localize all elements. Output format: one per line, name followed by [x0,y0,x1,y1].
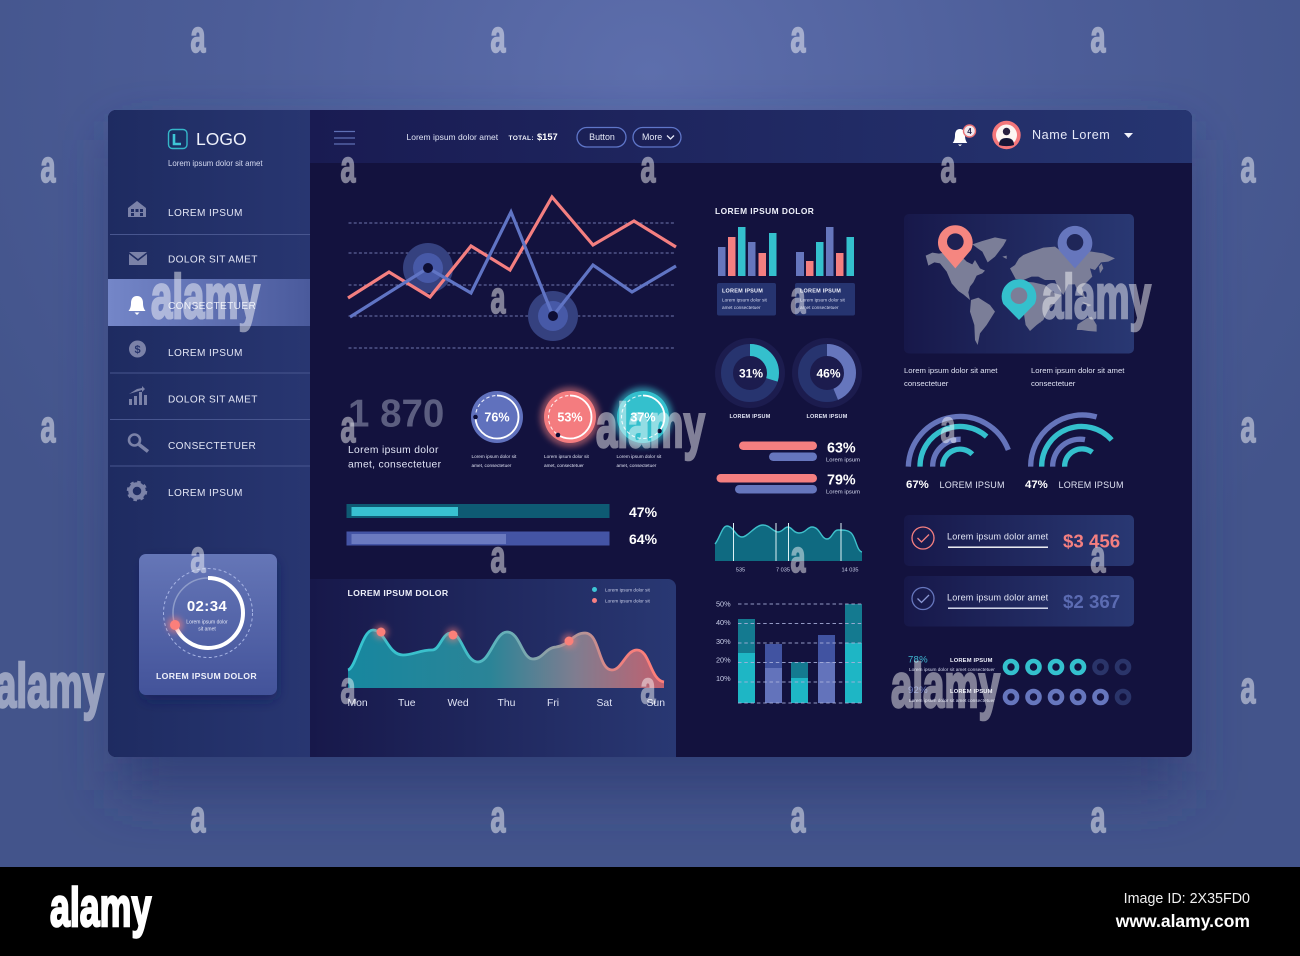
pin: teal [1002,279,1036,320]
y axis: 50% [716,600,731,608]
watermark tiles: a [190,531,206,582]
day axis [348,698,664,706]
menu highlight [108,279,310,326]
menu item: consectetuer (active): CONSECTETUER [168,301,256,312]
y axis: 20% [716,656,731,664]
logo: LOGO [196,129,247,149]
watermark tiles: a [1090,11,1106,62]
map caption: right: consectetuer [1031,379,1076,388]
watermark tiles: a [340,141,356,192]
stacked bar chart [716,600,862,703]
timer card: LOREM IPSUM DOLOR [156,671,257,681]
menu item: dolor sit amet: DOLOR SIT AMET [168,254,258,266]
timer card: 02:34 [187,598,227,615]
menu item: lorem ipsum: $ [134,344,141,356]
watermark tiles: a [790,531,806,582]
watermark tiles: a [640,141,656,192]
watermark tiles: a [1240,401,1256,452]
stat card: $2 367: $2 367 [1063,591,1120,612]
area stroke [348,630,664,682]
KPI number: 1 870 [348,392,444,436]
menu item: lorem ipsum [128,201,242,217]
menu item: lorem ipsum: LOREM IPSUM [168,208,243,219]
watermark wordmarks: alamy [891,651,1000,720]
image id: Image ID: 2X35FD0 [1124,891,1250,907]
day axis: Sun [646,698,665,709]
legend [592,587,651,604]
bar 5 [845,604,862,703]
timer card: Lorem ipsum dolor [186,620,228,626]
radial gauge: 76%: 76% [484,410,510,424]
donut chart: 31%: 31% [739,366,763,380]
arc gauge: 67%: 67% [906,479,929,491]
top bar summary: TOTAL: [508,135,534,142]
dashboard window [108,110,1192,757]
progress bar: 47%: 47% [629,504,658,520]
watermark tiles: a [490,791,506,842]
pill bars: 79%: 79% [827,472,856,488]
stat card: $2 367 [904,576,1134,626]
map caption: right: Lorem ipsum dolor sit amet [1031,366,1125,375]
radial gauge: 53%: 53% [557,410,583,424]
middle column heading: LOREM IPSUM DOLOR [715,206,814,216]
dot row: 92% [908,685,1129,704]
donut chart: 46%: LOREM IPSUM [806,414,848,420]
caption box: right [795,283,855,316]
caption box: left: LOREM IPSUM [722,288,763,294]
KPI number: Lorem ipsum dolor [348,445,439,456]
button: more [633,128,681,147]
bar 2 [765,644,782,703]
menu item: lorem ipsum [129,340,243,359]
y axis: 10% [716,674,731,683]
dot row: 92%: LOREM IPSUM [950,689,993,695]
watermark tiles: a [340,662,356,713]
top bar summary: Lorem ipsum dolor amet [406,132,499,142]
icon: dropdown arrow [1124,133,1133,138]
progress bar: 47% [346,504,657,518]
KPI number [348,399,443,469]
panel: sidebar [108,110,310,757]
y axis [716,600,731,683]
radial gauge: 76%: Lorem ipsum dolor sit [472,454,517,459]
watermark tiles: a [1090,791,1106,842]
line chart [348,197,676,348]
dot row: 78% [908,654,1129,673]
caption box: right: Lorem ipsum dolor sit [800,298,846,302]
day axis: Fri [547,698,559,709]
stat card: $3 456: Lorem ipsum dolor amet [947,532,1049,542]
avatar [992,121,1021,149]
footer bar [0,867,1300,956]
donut chart: 46% [792,338,862,420]
watermark tiles: a [190,791,206,842]
dot row: 92%: 92% [908,685,928,696]
watermark tiles: a [40,141,56,192]
bar 4 [818,635,835,703]
pin: red [938,225,973,268]
arc gauge: 47% [1025,415,1124,491]
watermark tiles: a [190,11,206,62]
icon: notification bell [953,125,976,146]
menu item: dolor sit amet [129,386,258,406]
radial gauge: 76%: amet, consectetuer [472,463,512,468]
red series [348,197,676,298]
dot row: 78%: Lorem ipsum dolor sit amet consectetuer [909,667,995,673]
button: more: More [642,132,662,142]
pill bars: 63%: 63% [827,440,856,456]
watermark wordmarks: alamy [596,391,705,460]
watermark tiles: a [1090,531,1106,582]
menu item: dolor sit amet [129,252,258,266]
watermark tiles: a [790,11,806,62]
small area chart: 7 035 [776,568,790,574]
stat card: $3 456: $3 456 [1063,530,1120,552]
day axis: Wed [448,698,469,709]
logo subtitle: Lorem ipsum dolor sit amet [168,159,263,168]
pin: blue [1058,226,1092,268]
radial gauge: 37%: amet, consectetuer [616,463,657,468]
watermark tiles: a [640,662,656,713]
radial gauge: 53%: Lorem ipsum dolor sit [544,454,590,459]
top bar summary [407,134,558,142]
menu item: consectetuer: CONSECTETUER [168,441,256,452]
watermark tiles: a [40,401,56,452]
menu item: lorem ipsum: LOREM IPSUM [168,488,243,499]
area markers [374,624,576,648]
mini bar chart: left [718,227,776,276]
watermark wordmarks: alamy [1042,262,1151,331]
caption box: right: LOREM IPSUM [800,288,841,294]
radial gauge: 37% [613,387,673,468]
blue series [350,212,676,317]
panel: top bar [310,110,1192,163]
pill bars: 63% [739,440,860,464]
watermark wordmarks: alamy [151,262,260,331]
top bar summary: $157 [537,132,558,142]
y axis: 40% [716,618,731,627]
watermark tiles: a [490,11,506,62]
arc gauge: 67% [906,417,1008,491]
day axis: Sat [596,698,612,709]
area chart title: LOREM IPSUM DOLOR [348,588,449,598]
map caption: right [1031,366,1125,388]
footer logo: alamy [50,876,152,938]
bar 3 [791,662,808,703]
stat card: $3 456 [904,515,1134,566]
button: Button [589,132,615,142]
small area chart: 14 035 [841,568,859,574]
pill bars: 79%: Lorem ipsum [826,490,860,496]
continents [926,237,1115,345]
map caption: left: consectetuer [904,379,949,388]
arc gauge: 67%: LOREM IPSUM [940,480,1005,490]
radial gauge: 37%: 37% [630,410,656,424]
timer card [139,554,277,700]
series highlight: first marker [403,243,453,293]
mini bar chart: right [796,227,854,276]
donut chart: 46%: 46% [816,366,841,380]
watermark tiles: a [490,272,506,323]
donut chart: 31% [715,338,785,420]
bar 1 [738,619,755,703]
watermark tiles: a [340,401,356,452]
pill bars: 63%: Lorem ipsum [826,458,860,464]
progress bar: 64%: 64% [629,531,658,547]
radial gauge: 53% [540,387,600,468]
watermark wordmarks [0,262,1151,720]
arc gauge: 47%: 47% [1025,479,1048,491]
caption box: left: amet consectetuer [722,305,761,310]
website: www.alamy.com [1115,911,1250,931]
map caption: left: Lorem ipsum dolor sit amet [904,366,998,375]
radial gauge: 76% [471,391,523,468]
y axis: 30% [716,637,731,646]
dot row: 92%: Lorem ipsum dolor sit amet consectetuer [909,698,995,704]
watermark tiles: a [940,401,956,452]
progress bar: 64% [346,532,657,546]
card shadow [118,140,1182,790]
small area chart [715,523,862,574]
map and pins [926,225,1115,345]
watermark tiles: a [1240,662,1256,713]
panel: area chart [310,579,676,757]
legend: Lorem ipsum dolor sit [605,598,651,604]
watermark tiles: a [790,791,806,842]
pill bars: 79% [716,472,860,496]
menu item: dolor sit amet: DOLOR SIT AMET [168,394,258,406]
watermark tiles: a [940,141,956,192]
day axis: Tue [398,698,416,709]
menu item: consectetuer [129,434,256,452]
watermark tiles: a [490,531,506,582]
map caption: left [904,366,998,388]
timer card: sit amet [198,626,216,632]
watermark tiles: a [790,272,806,323]
menu item: consectetuer (active) [128,296,256,315]
panel: world map [904,214,1134,354]
donut chart: 31%: LOREM IPSUM [729,414,771,420]
stat card: $2 367: Lorem ipsum dolor amet [947,592,1049,602]
button [577,128,626,147]
watermark tiles: a [1240,141,1256,192]
legend: Lorem ipsum dolor sit [605,588,651,592]
small area chart: 535 [736,568,745,574]
KPI number: amet, consectetuer [348,460,442,470]
icon: notification bell: 4 [967,127,972,136]
dot row: 78%: 78% [908,654,928,666]
logo [168,129,247,149]
user name: Name Lorem [1032,128,1110,142]
area fill [348,630,664,688]
dot row: 78%: LOREM IPSUM [950,658,993,664]
menu item: lorem ipsum: LOREM IPSUM [168,348,243,359]
series highlight: second marker [528,291,578,341]
caption box: right: amet consectetuer [800,305,839,310]
radial gauge: 37%: Lorem ipsum dolor sit [616,454,662,459]
menu item: lorem ipsum [128,482,243,500]
day axis: Mon [348,698,368,709]
radial gauge: 53%: amet, consectetuer [544,463,584,468]
icon: hamburger menu [334,132,355,144]
caption box: left: Lorem ipsum dolor sit [722,298,768,302]
caption box: left [717,283,776,316]
arc gauge: 47%: LOREM IPSUM [1058,480,1124,490]
day axis: Thu [498,698,516,709]
